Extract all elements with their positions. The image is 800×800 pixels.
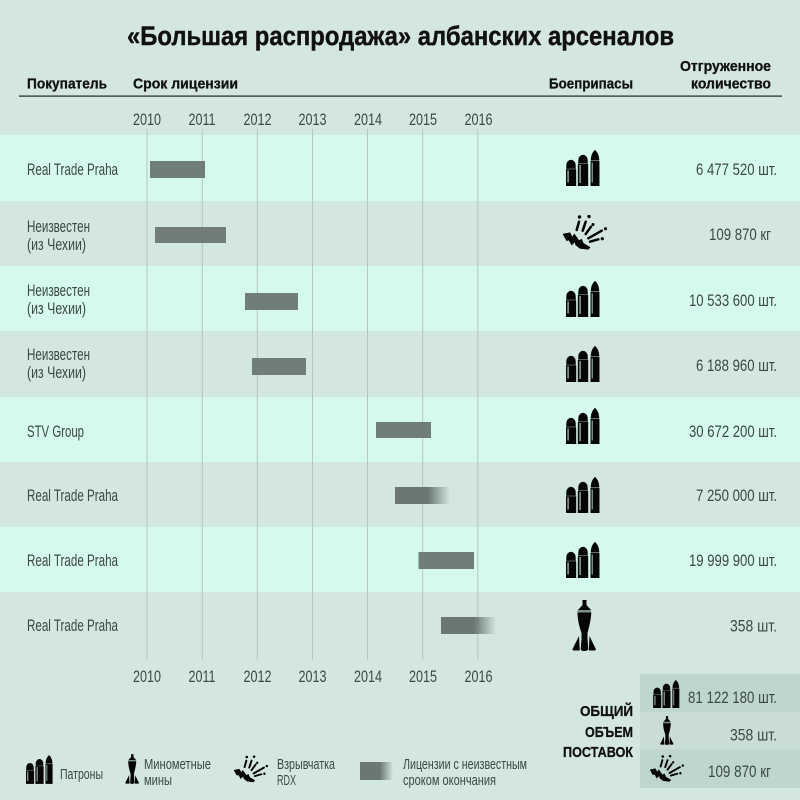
total heading: ОБЩИЙ [580, 702, 633, 720]
buyer names: Неизвестен [27, 218, 90, 236]
legend: мины [144, 772, 172, 789]
shipped quantities: 19 999 900 шт. [689, 552, 777, 570]
buyer names: Неизвестен [27, 346, 90, 364]
licence bars [150, 161, 496, 634]
legend: Минометные [144, 756, 211, 773]
panel: total volumes: 358 шт. [730, 726, 777, 744]
total heading [563, 702, 634, 761]
total heading: ОБЪЕМ [585, 724, 633, 741]
shipped quantities: 6 477 520 шт. [696, 161, 777, 179]
table header: количество [691, 76, 771, 92]
legend: Лицензии с неизвестным [403, 756, 527, 773]
buyer names [27, 161, 119, 635]
total heading: ПОСТАВОК [563, 744, 634, 761]
year labels top: 2010 [133, 110, 161, 129]
shipped quantities: 10 533 600 шт. [689, 292, 777, 310]
year labels bottom: 2012 [244, 667, 272, 686]
shipped quantities: 6 188 960 шт. [696, 357, 777, 375]
shipped quantities: 7 250 000 шт. [696, 487, 777, 505]
year labels top: 2013 [298, 110, 326, 129]
year labels bottom: 2011 [188, 667, 216, 686]
buyer names: Real Trade Praha [27, 487, 119, 505]
year labels top: 2012 [244, 110, 272, 129]
buyer names: Real Trade Praha [27, 161, 119, 179]
legend: Патроны [60, 766, 103, 783]
buyer names: Неизвестен [27, 282, 90, 300]
year labels top: 2014 [354, 110, 382, 129]
year labels bottom: 2013 [298, 667, 326, 686]
table header: Отгруженное [680, 58, 771, 75]
year labels bottom: 2010 [133, 667, 161, 686]
panel: total volumes: 109 870 кг [708, 763, 771, 781]
year grid lines [147, 129, 478, 660]
shipped quantities: 109 870 кг [709, 226, 771, 244]
legend: RDX [277, 772, 296, 789]
title: «Большая распродажа» албанских арсеналов [127, 21, 674, 51]
legend: Взрывчатка [277, 756, 335, 773]
year labels top: 2015 [409, 110, 437, 129]
buyer names: STV Group [27, 423, 84, 441]
shipped quantities [689, 161, 777, 636]
year labels bottom: 2015 [409, 667, 437, 686]
shipped quantities: 30 672 200 шт. [689, 423, 777, 441]
year labels bottom [133, 667, 492, 686]
buyer names: (из Чехии) [27, 300, 86, 318]
buyer names: Real Trade Praha [27, 552, 119, 570]
buyer names: (из Чехии) [27, 364, 86, 382]
buyer names: (из Чехии) [27, 236, 86, 254]
year labels bottom: 2014 [354, 667, 382, 686]
year labels top: 2016 [464, 110, 492, 129]
panel: total volumes [640, 674, 800, 788]
table header: Срок лицензии [133, 76, 238, 92]
alternating row bands [0, 135, 800, 592]
table header: Боеприпасы [549, 76, 633, 92]
table header: Покупатель [27, 76, 107, 92]
legend [26, 754, 527, 789]
table header [19, 58, 782, 97]
ammunition icons [563, 150, 607, 651]
year labels top: 2011 [188, 110, 216, 129]
legend: сроком окончания [403, 772, 496, 789]
year labels bottom: 2016 [464, 667, 492, 686]
year labels top [133, 110, 492, 129]
buyer names: Real Trade Praha [27, 617, 119, 635]
shipped quantities: 358 шт. [730, 618, 777, 636]
panel: total volumes: 81 122 180 шт. [688, 689, 777, 707]
